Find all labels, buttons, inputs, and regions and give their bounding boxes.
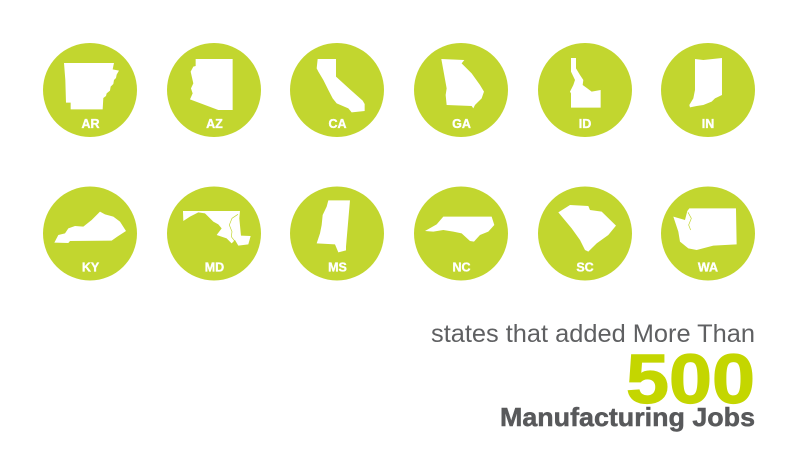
state badge: SC: SC	[576, 260, 594, 274]
state badge: NC: NC	[452, 260, 471, 274]
caption	[431, 320, 755, 432]
state badge: AR: AR	[81, 117, 100, 131]
caption line: states that added more than: states that added More Than	[431, 320, 755, 348]
state badge: AZ: AZ	[206, 117, 223, 131]
state badge: AR	[43, 43, 137, 137]
state badge: AZ	[167, 43, 261, 137]
state badge: MD: MD	[205, 260, 224, 274]
puget sound	[688, 212, 691, 230]
state badge: IN: IN	[702, 117, 714, 131]
state badge: SC	[538, 186, 632, 280]
state badge: WA: WA	[698, 260, 718, 274]
state badge: ID: ID	[579, 117, 591, 131]
state badge: GA	[414, 43, 508, 137]
state badge: IN	[661, 43, 755, 137]
state badge: KY: KY	[82, 260, 100, 274]
state badge: CA	[290, 43, 384, 137]
state badge: MS: MS	[328, 260, 347, 274]
state badge: ID	[538, 43, 632, 137]
big number: 500: 500	[626, 340, 755, 418]
caption line: manufacturing jobs: Manufacturing Jobs	[500, 402, 755, 432]
state badge: CA: CA	[328, 117, 347, 131]
state badge: MD	[167, 186, 261, 280]
state badge: WA	[661, 186, 755, 280]
state badge: NC	[414, 186, 508, 280]
chesapeake bay	[229, 214, 238, 241]
state badge: KY	[43, 186, 137, 280]
state badge: MS	[290, 186, 384, 280]
state badge: GA: GA	[452, 117, 471, 131]
